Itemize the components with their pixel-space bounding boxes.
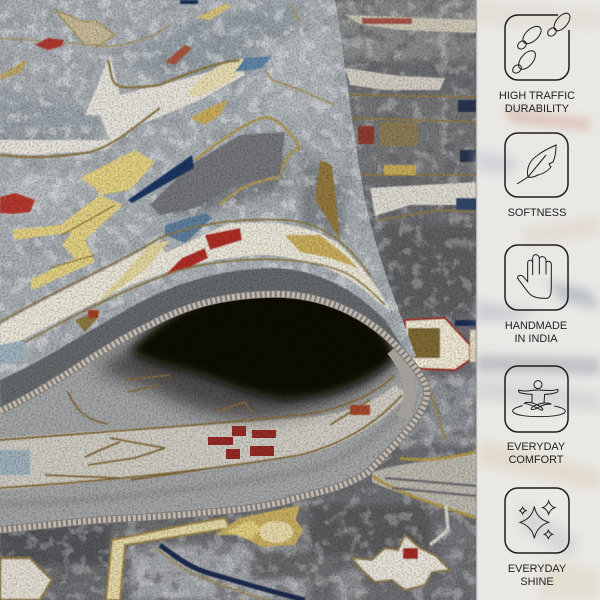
label: COMFORT [509,454,564,466]
label: EVERYDAY [508,563,567,575]
white motif [0,55,245,155]
yellow motif [12,150,155,290]
feature: everyday comfort [505,366,568,466]
feature: high traffic durability [499,10,575,115]
red flower on underside [208,426,276,459]
dark hollow shading [95,304,395,418]
dark noise texture over rug [0,0,476,600]
icon: meditating figure [505,366,568,432]
label: HIGH TRAFFIC [499,90,575,102]
icon: feather [505,133,568,197]
label [499,90,575,115]
feature: softness [505,133,568,219]
icon: hand [505,245,568,310]
feature: handmade in india [505,245,568,345]
label [508,563,567,588]
top rolled surface [0,0,416,413]
red flowers on top [0,193,35,214]
roll underside [0,298,423,526]
cream band on underside [0,385,408,490]
floor rug: visible flat rug behind the roll [0,0,476,600]
label: DURABILITY [505,103,570,115]
feature: everyday shine [505,488,569,588]
icon: footprints [505,10,573,80]
side panel: translucent strip [476,0,600,600]
rope binding edge [0,294,427,530]
underside pattern [0,375,402,488]
cream border band [0,222,390,352]
label: EVERYDAY [507,441,566,453]
navy motif [128,155,194,203]
rug photo [0,0,476,600]
label [505,320,567,345]
grey edge band [0,268,410,408]
label: SOFTNESS [508,207,566,219]
label: IN INDIA [515,333,558,345]
label: HANDMADE [505,320,567,332]
label [507,441,566,466]
dark hollow core [130,284,396,400]
icon: sparkles [505,488,569,553]
label: SHINE [520,576,554,588]
